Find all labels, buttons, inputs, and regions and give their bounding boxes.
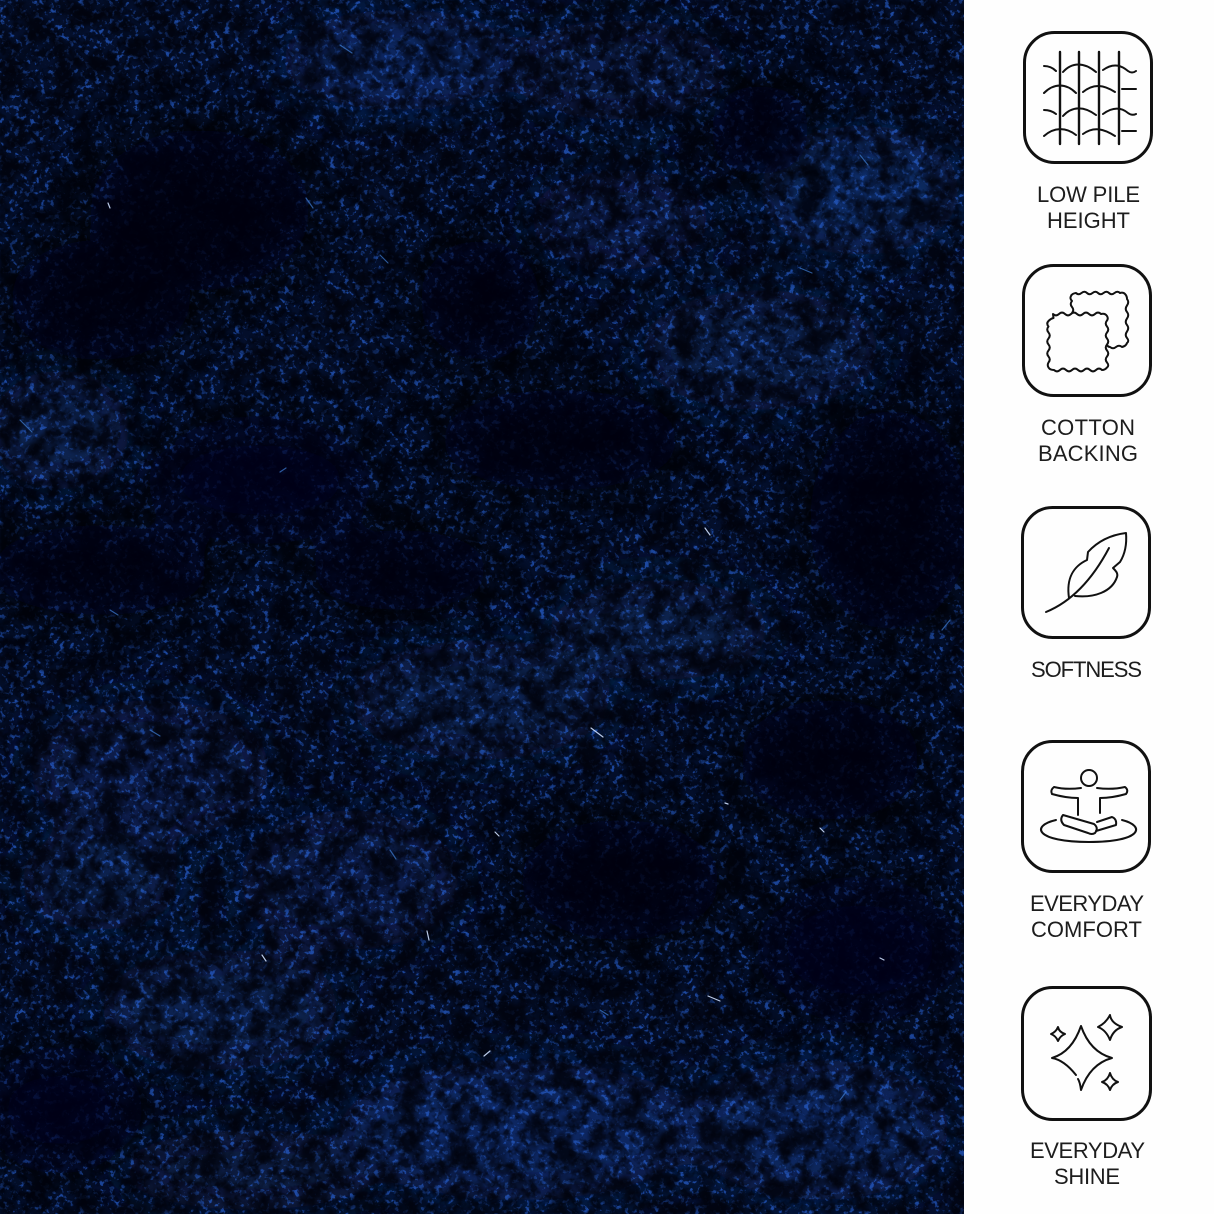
label: everyday comfort: EVERYDAY xyxy=(1030,891,1144,916)
bright stray fibres xyxy=(108,203,884,1056)
label: softness: SOFTNESS xyxy=(1031,657,1142,682)
label: low pile height: LOW PILE xyxy=(1037,182,1140,207)
label: cotton backing: BACKING xyxy=(1038,441,1138,466)
icon: sparkles xyxy=(1022,988,1150,1120)
feature: softness xyxy=(1022,508,1150,682)
panel: feature list xyxy=(964,0,1214,1214)
lighter tonal areas of the pile xyxy=(0,10,960,1210)
label: everyday comfort: COMFORT xyxy=(1031,917,1142,942)
label: everyday shine: SHINE xyxy=(1054,1164,1120,1189)
feature: everyday shine xyxy=(1022,988,1150,1189)
blue fibre speckle xyxy=(0,0,964,1214)
label: everyday shine: EVERYDAY xyxy=(1030,1138,1145,1163)
label: cotton backing: COTTON xyxy=(1041,415,1135,440)
icon: fabric swatches xyxy=(1024,266,1150,396)
fine dark clumps xyxy=(0,0,964,1214)
feature: everyday comfort xyxy=(1022,742,1150,942)
icon: woven pile xyxy=(1024,32,1152,162)
icon: seated meditation figure xyxy=(1022,742,1150,872)
panel: rug texture photo xyxy=(0,0,970,1214)
feature: low pile height xyxy=(1024,32,1152,233)
dark mottled clumps xyxy=(0,0,964,1214)
darkest shadowed areas xyxy=(0,85,970,1160)
icon: feather xyxy=(1022,508,1150,638)
label: low pile height: HEIGHT xyxy=(1047,208,1130,233)
feature: cotton backing xyxy=(1024,266,1150,466)
